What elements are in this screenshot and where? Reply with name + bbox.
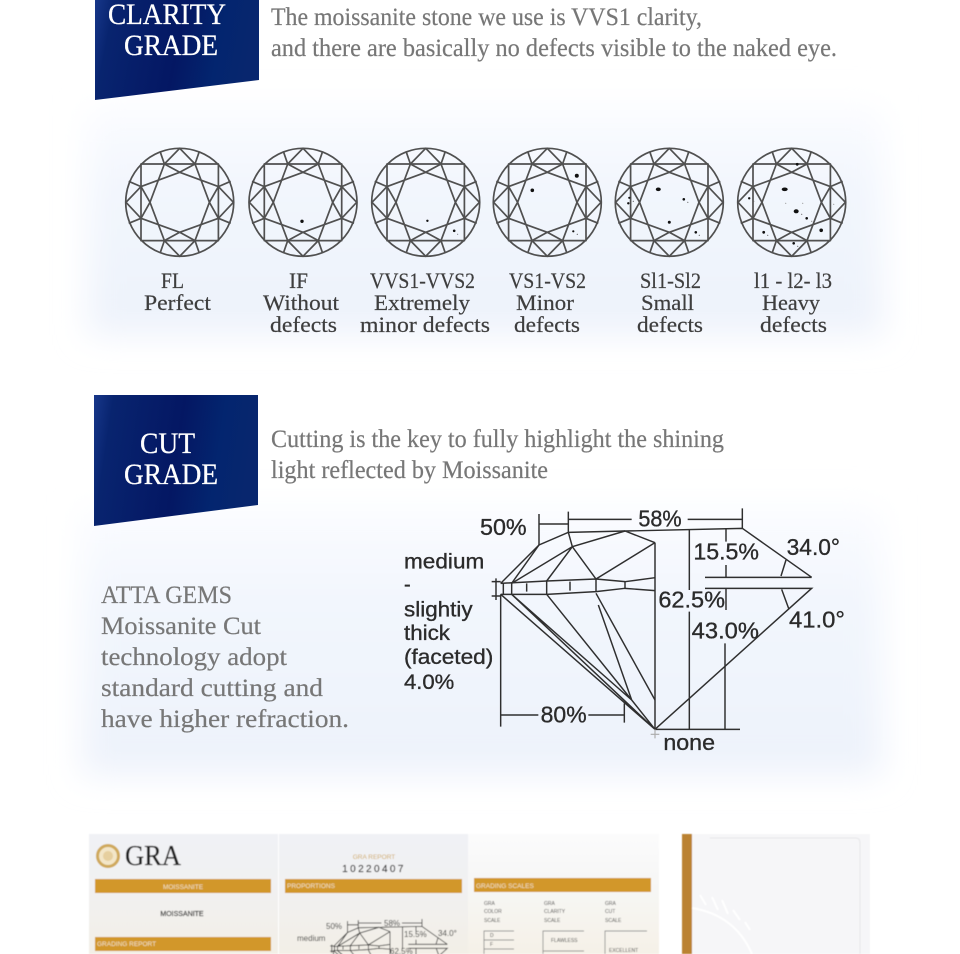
cut technology text: standard cutting and [101, 675, 324, 702]
diamond proportions diagram: 43.0% [692, 617, 759, 643]
grade labels: Minor [516, 290, 575, 315]
clarity grade banner [95, 0, 259, 100]
diamond VS [493, 148, 601, 256]
grade labels: defects [760, 312, 827, 337]
certificate page 2 [279, 834, 468, 954]
grade labels: IF [289, 268, 308, 293]
certificate page 2: 10220407 [342, 864, 406, 875]
miniature proportions diagram: 58% [384, 919, 400, 928]
certificate page 3: CLARITY [544, 909, 566, 915]
diamond proportions diagram: - [404, 573, 411, 597]
cut grade banner: GRADE [124, 458, 218, 491]
diamond proportions diagram: (faceted) [404, 645, 493, 669]
diamond proportions diagram: 4.0% [404, 670, 454, 694]
diamond proportions diagram: 50% [480, 514, 527, 540]
miniature proportions diagram: medium [297, 934, 326, 943]
certificate page 1: GRADING REPORT [97, 941, 156, 948]
diamond I [738, 148, 846, 256]
certificate page 2: GRA REPORT [353, 854, 395, 861]
GRA logo: GRA [125, 841, 182, 872]
cut grade section [94, 395, 845, 755]
GRA logo [98, 841, 182, 872]
certificate page 3: SCALE [544, 918, 561, 924]
GRA certificate [89, 834, 870, 954]
certificate page 3: SCALE [605, 918, 622, 924]
grade labels: defects [270, 312, 337, 337]
diamond proportions diagram: 58% [638, 506, 682, 532]
clarity description [271, 4, 837, 62]
grade labels: Heavy [762, 290, 820, 315]
grade labels: Extremely [374, 290, 470, 315]
certificate page 3: GRA [605, 901, 616, 907]
diamond proportions diagram: slightiy [404, 598, 473, 622]
soft blue background: clarity [88, 105, 883, 335]
grade labels: defects [637, 312, 703, 337]
certificate page 3: CUT [605, 909, 615, 915]
diamond proportions diagram: 80% [541, 702, 587, 728]
diamond proportions diagram: none [663, 730, 715, 755]
certificate page 1 [89, 834, 278, 954]
diamond proportions diagram [404, 506, 845, 755]
cut description: Cutting is the key to fully highlight the shining [271, 426, 724, 453]
cut technology text: have higher refraction. [101, 706, 349, 733]
miniature proportions diagram [297, 919, 457, 954]
grade labels: Perfect [144, 290, 211, 315]
cut technology text: Moissanite Cut [101, 613, 261, 640]
miniature proportions diagram: 50% [326, 922, 342, 931]
diamond proportions diagram: thick [404, 621, 450, 645]
diamond proportions diagram: 62.5% [658, 586, 725, 612]
certificate page 3: SCALE [484, 918, 501, 924]
grade labels: FL [161, 268, 184, 293]
grade labels: Small [641, 290, 694, 315]
certificate page 3: EXCELLENT [609, 948, 638, 954]
grade labels: Sl1-Sl2 [640, 268, 701, 293]
diamond proportions diagram: 41.0° [789, 606, 845, 632]
certificate page 3: FLAWLESS [551, 938, 578, 944]
certificate page 3: F [490, 942, 493, 948]
cut technology text: technology adopt [101, 644, 287, 671]
certificate page 3: D [490, 933, 494, 939]
grade labels: VVS1-VVS2 [370, 268, 475, 293]
certificate page 3: COLOR [484, 909, 502, 915]
clarity description: The moissanite stone we use is VVS1 clarity, [271, 4, 702, 31]
certificate page 3 [468, 834, 659, 954]
miniature proportions diagram: 34.0° [438, 929, 457, 938]
grade labels: minor defects [360, 312, 490, 337]
certificate page 1: MOISSANITE [160, 911, 204, 918]
clarity grade banner: GRADE [124, 29, 218, 62]
certificate cover [682, 834, 870, 954]
diamond proportions diagram: 34.0° [787, 534, 840, 560]
diamond proportions diagram: 15.5% [693, 538, 759, 564]
clarity description: and there are basically no defects visible to the naked eye. [271, 35, 837, 62]
miniature proportions diagram: 15.5% [404, 930, 427, 939]
diamond FL [126, 148, 234, 256]
grade labels: Without [263, 290, 339, 315]
grade labels: VS1-VS2 [509, 268, 586, 293]
cut description: light reflected by Moissanite [271, 457, 548, 484]
cut technology text [101, 582, 349, 733]
diamond VVS [372, 148, 480, 256]
cut grade banner [94, 395, 258, 526]
diamond IF [249, 148, 357, 256]
grade labels: l1 - l2- l3 [754, 268, 832, 293]
grade labels [144, 268, 832, 337]
certificate page 3: GRADING SCALES [476, 883, 534, 890]
certificate page 3: GRA [544, 901, 556, 907]
certificate page 1: MOISSANITE [163, 884, 204, 891]
diamond proportions diagram: medium [404, 549, 484, 573]
certificate page 3: GRA [484, 901, 496, 907]
cut description [271, 426, 724, 484]
cut grade banner: CUT [140, 427, 195, 460]
soft blue background: cut [82, 505, 882, 775]
clarity grade section [95, 0, 846, 337]
cut technology text: ATTA GEMS [101, 582, 232, 609]
grade labels: defects [514, 312, 580, 337]
diamond SI [615, 148, 723, 256]
certificate page 2: PROPORTIONS [287, 883, 336, 890]
